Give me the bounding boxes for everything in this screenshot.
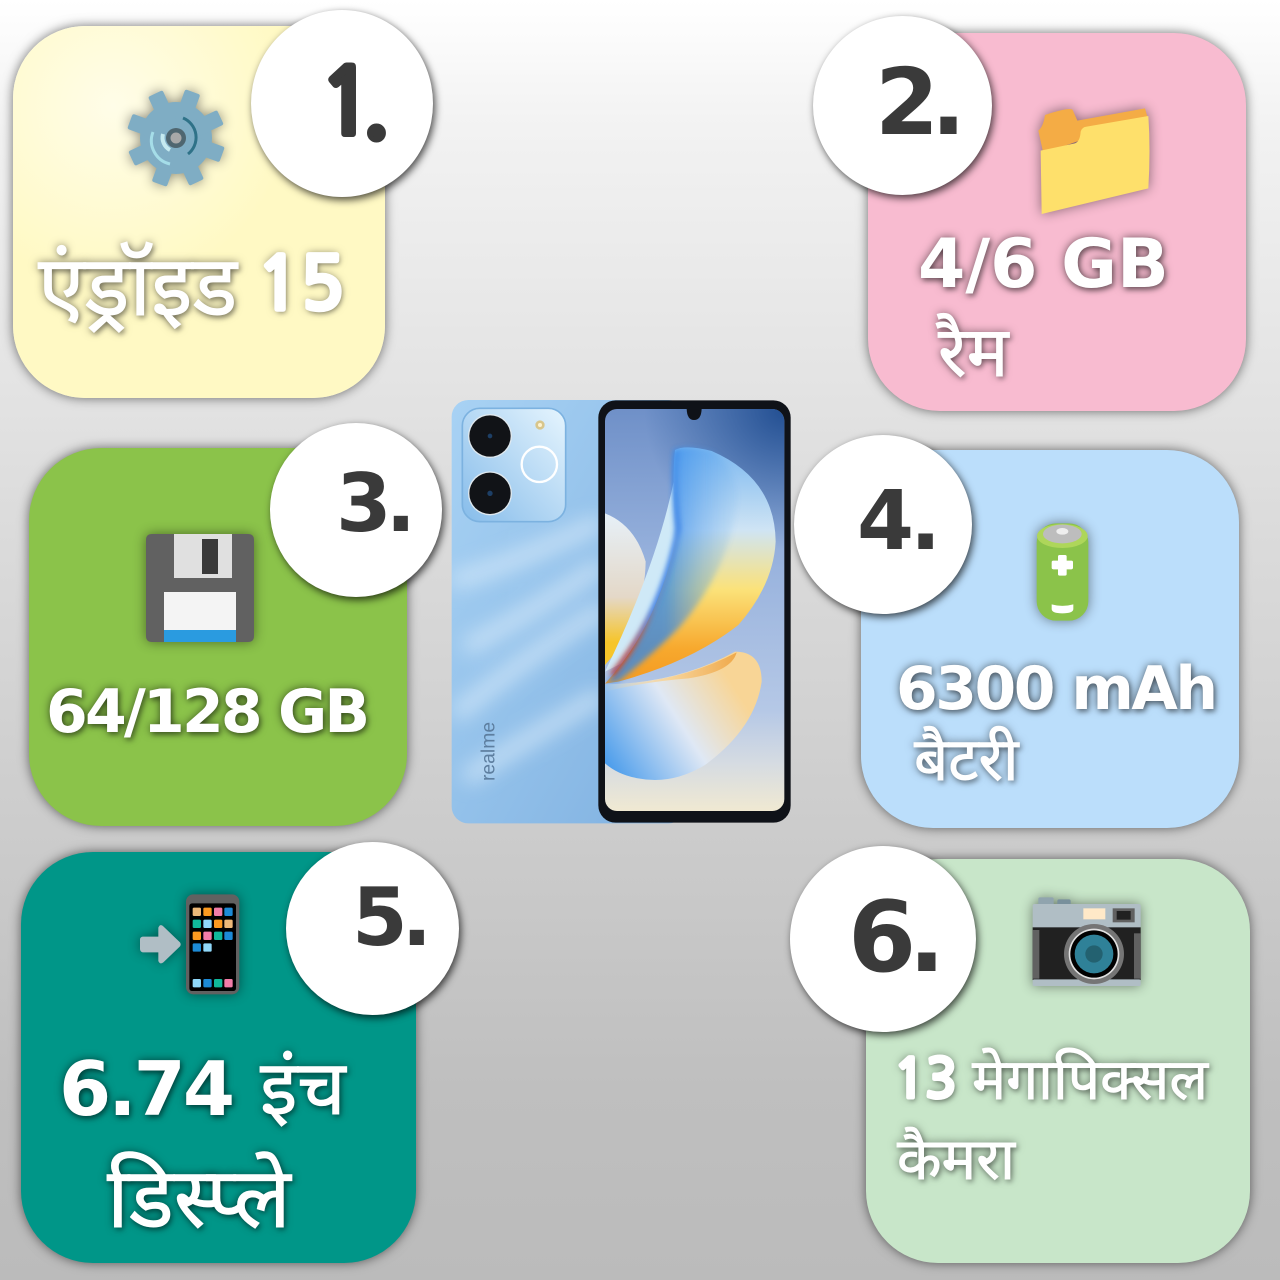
badge: 1 bbox=[251, 10, 433, 197]
panel: battery card bbox=[861, 450, 1239, 828]
text: display: डिस्प्ले bbox=[107, 1151, 291, 1245]
badge: 5 bbox=[286, 842, 459, 1015]
badge: 4: 4. bbox=[857, 474, 937, 569]
badge: 2: 2. bbox=[875, 49, 958, 156]
badge: 4 bbox=[794, 435, 972, 614]
panel: storage card bbox=[29, 448, 407, 826]
brand logo: realme bbox=[478, 722, 499, 781]
badge: 3: 3. bbox=[336, 457, 410, 550]
phone front bbox=[598, 400, 791, 823]
text: 13: 13 bbox=[893, 1054, 956, 1107]
text: 6.74: 6.74 bbox=[59, 1045, 232, 1133]
badge: 2 bbox=[813, 16, 992, 195]
badge: 3 bbox=[270, 423, 442, 597]
badge: 5: 5. bbox=[352, 871, 426, 964]
icon: gear bbox=[122, 84, 230, 192]
phone image bbox=[452, 400, 791, 824]
icon: floppy disk bbox=[138, 526, 262, 650]
text: camera: कैमरा bbox=[897, 1127, 1015, 1192]
text: 15: 15 bbox=[256, 249, 344, 322]
badge: 6: 6. bbox=[848, 881, 937, 995]
panel: display card bbox=[21, 852, 416, 1263]
icon: folder bbox=[1032, 102, 1158, 220]
text: RAM: रैम bbox=[938, 313, 1008, 391]
text: 64/128 GB: 64/128 GB bbox=[46, 677, 367, 747]
panel: android card bbox=[13, 26, 385, 398]
phone back bbox=[452, 400, 685, 823]
badge: 6 bbox=[790, 846, 976, 1032]
icon: camera bbox=[1024, 890, 1150, 994]
panel: RAM card bbox=[868, 33, 1246, 411]
text: 6300 mAh: 6300 mAh bbox=[896, 654, 1216, 724]
icon: battery bbox=[1028, 515, 1097, 629]
panel: camera card bbox=[866, 859, 1250, 1263]
text: android: एंड्रॉइड bbox=[38, 239, 237, 333]
icon: phone with arrow bbox=[134, 888, 246, 1002]
text: 4/6 GB: 4/6 GB bbox=[918, 225, 1169, 304]
text: megapixel: मेगापिक्सल bbox=[972, 1048, 1208, 1112]
badge: 1: 1. bbox=[319, 57, 378, 148]
text: battery: बैटरी bbox=[914, 726, 1019, 793]
text: inch: इंच bbox=[260, 1046, 346, 1131]
